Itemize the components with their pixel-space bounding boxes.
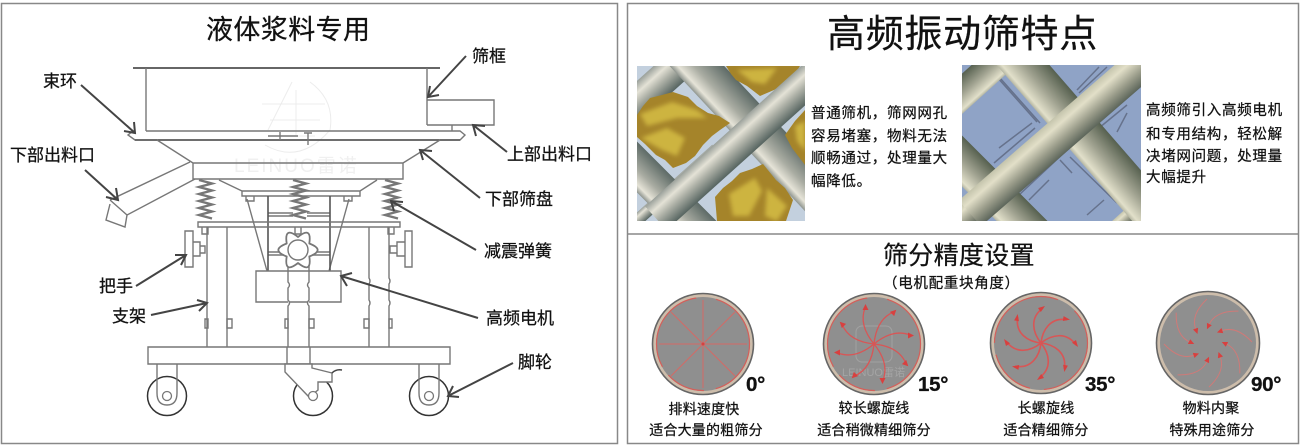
lower discharge chute: [106, 162, 195, 227]
vibration motor: [256, 271, 341, 302]
dial 35 degrees: [990, 292, 1092, 394]
subheading: （电机配重块角度）: [883, 275, 1020, 292]
label: lower discharge: 下部出料口: [10, 146, 95, 165]
label: handle: [99, 255, 186, 296]
lower pan: [157, 140, 440, 179]
clamp ring: [128, 131, 465, 145]
label: handle: 把手: [99, 277, 133, 296]
caption 90 degrees: 特殊用途筛分: [1169, 422, 1255, 438]
mesh image: high frequency sieve: [962, 65, 1141, 221]
text: ordinary sieve: 容易堵塞，物料无法: [811, 127, 948, 145]
side handles: [185, 231, 412, 267]
label: sieve frame: 筛框: [472, 47, 506, 66]
spring plate: [198, 222, 400, 234]
watermark: LEINUO雷诺: [234, 155, 359, 177]
label: clamp ring: 束环: [43, 72, 77, 91]
caption 35 degrees: 长螺旋线: [1018, 400, 1074, 416]
dial 90 degrees: [1156, 292, 1260, 394]
label: lower pan: [420, 150, 553, 209]
star handwheel: [278, 233, 318, 267]
caption 0 degrees: 排料速度快: [668, 401, 740, 417]
panel: high frequency sieve features: [564, 1, 1298, 443]
caption 90 degrees: 物料内聚: [1183, 400, 1239, 416]
text: ordinary sieve: 顺畅通过，处理量大: [811, 150, 948, 167]
text: high frequency sieve: [1146, 102, 1283, 186]
label: casters: 脚轮: [518, 353, 552, 372]
text: ordinary sieve: [811, 105, 948, 190]
dial 15 degrees: LEINUO雷诺: [842, 366, 905, 379]
text: high frequency sieve: 高频筛引入高频电机: [1146, 102, 1283, 119]
caption 35 degrees: 适合精细筛分: [1003, 422, 1089, 438]
label: lower discharge: [10, 146, 118, 200]
label 35 degrees: 35°: [1085, 373, 1115, 396]
heading: features: 高频振动筛特点: [827, 14, 1098, 56]
caption 15 degrees: 较长螺旋线: [838, 400, 910, 416]
support legs: [205, 227, 392, 347]
label: lower pan: 下部筛盘: [485, 190, 553, 209]
label: sieve frame: [428, 47, 506, 97]
label: casters: [448, 353, 552, 397]
caption 15 degrees: [817, 400, 931, 438]
caption 90 degrees: [1169, 400, 1255, 438]
label: springs: 减震弹簧: [484, 242, 552, 261]
text: ordinary sieve: 普通筛机，筛网网孔: [811, 105, 948, 122]
panel: liquid slurry machine diagram: [2, 4, 618, 444]
label: motor: [341, 273, 554, 328]
caption 15 degrees: 适合稍微精细筛分: [817, 422, 931, 438]
label 15 degrees: 15°: [918, 373, 948, 396]
machine drawing: [106, 68, 494, 416]
label 0 degrees: 0°: [746, 373, 765, 396]
sieve frame: [133, 68, 494, 131]
label: support: 支架: [112, 307, 146, 326]
text: ordinary sieve: 幅降低。: [811, 173, 872, 190]
dial 15 degrees: [824, 294, 924, 394]
inner motor mount: [219, 180, 377, 271]
watermark: [234, 82, 359, 177]
dampening springs: [199, 180, 398, 218]
base frame: [148, 347, 450, 364]
label: upper discharge: [473, 125, 592, 164]
text: high frequency sieve: 决堵网问题，处理量: [1146, 148, 1283, 165]
text: high frequency sieve: 和专用结构，轻松解: [1146, 126, 1283, 143]
title: 液体浆料专用: [206, 15, 370, 45]
label 90 degrees: 90°: [1251, 373, 1281, 396]
caption 35 degrees: [1003, 400, 1089, 438]
dial 0 degrees: [652, 294, 754, 394]
label: springs: [391, 201, 552, 261]
label: support: [112, 300, 207, 326]
caption 0 degrees: 适合大量的粗筛分: [649, 422, 763, 438]
caption 0 degrees: [649, 401, 763, 438]
casters: [148, 364, 448, 416]
label: upper discharge: 上部出料口: [507, 145, 592, 164]
label: clamp ring: [43, 72, 135, 133]
mesh image: clogged ordinary sieve: [637, 66, 805, 221]
label: motor: 高频电机: [486, 309, 554, 328]
text: high frequency sieve: 大幅提升: [1146, 169, 1207, 186]
heading: screening precision: 筛分精度设置: [883, 242, 1035, 270]
center column: [288, 262, 309, 347]
